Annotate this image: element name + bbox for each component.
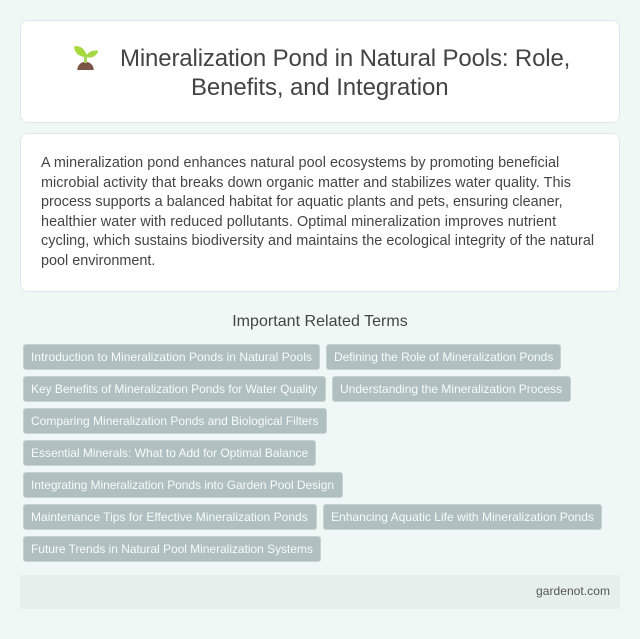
- intro paragraph: [41, 155, 594, 268]
- title: Mineralization Pond in Natural Pools: Role,: [120, 45, 570, 72]
- tag: [23, 376, 326, 402]
- tag: Essential Minerals: What to Add for Optimal Balance: [31, 446, 308, 460]
- tag: Comparing Mineralization Ponds and Biological Filters: [31, 414, 318, 428]
- intro text card: [20, 133, 620, 292]
- intro paragraph: cycling, which sustains biodiversity and maintains the ecological integrity of the natural: [41, 233, 594, 249]
- tag: Maintenance Tips for Effective Mineralization Ponds: [31, 510, 308, 524]
- intro paragraph: microbial activity that breaks down organic matter and stabilizes water quality. This: [41, 174, 571, 190]
- header card: [20, 20, 620, 123]
- footer bar: [20, 575, 620, 609]
- tag: [23, 504, 317, 530]
- tag: Integrating Mineralization Ponds into Garden Pool Design: [31, 478, 334, 492]
- related terms heading: Important Related Terms: [232, 313, 408, 330]
- intro paragraph: pool environment.: [41, 252, 155, 268]
- tag: [23, 440, 316, 466]
- tag: [23, 344, 320, 370]
- tag: [23, 472, 343, 498]
- tag: Understanding the Mineralization Process: [340, 382, 562, 396]
- intro paragraph: process supports a balanced habitat for aquatic plants and pets, ensuring cleaner,: [41, 194, 563, 210]
- tag: [23, 536, 321, 562]
- title: [120, 45, 570, 101]
- tag: Defining the Role of Mineralization Ponds: [334, 350, 553, 364]
- tag: Introduction to Mineralization Ponds in Natural Pools: [31, 350, 312, 364]
- tag: [332, 376, 571, 402]
- tag: Enhancing Aquatic Life with Mineralization Ponds: [331, 510, 594, 524]
- icon: seedling: [74, 46, 98, 70]
- tag: [323, 504, 602, 530]
- tag: [326, 344, 561, 370]
- tag: Future Trends in Natural Pool Mineralization Systems: [31, 542, 313, 556]
- tag: Key Benefits of Mineralization Ponds for Water Quality: [31, 382, 317, 396]
- intro paragraph: healthier water with reduced pollutants. Optimal mineralization improves nutrient: [41, 214, 556, 230]
- footer source: gardenot.com: [536, 584, 610, 598]
- intro paragraph: A mineralization pond enhances natural pool ecosystems by promoting beneficial: [41, 155, 559, 171]
- related terms tags: [23, 344, 602, 562]
- tag: [23, 408, 327, 434]
- title: Benefits, and Integration: [191, 74, 448, 101]
